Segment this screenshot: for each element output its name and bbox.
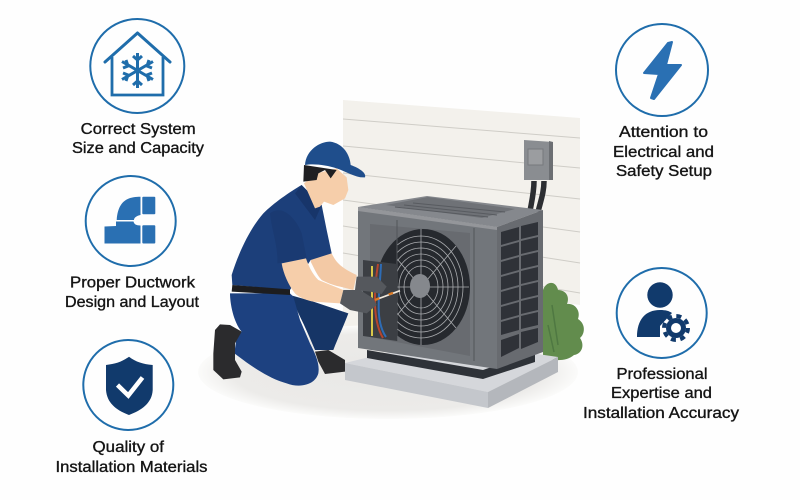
side face [497,210,543,369]
collar [295,185,322,220]
label: Professional [616,366,708,383]
icon: person with gear [617,268,707,358]
torso shirt [232,185,332,290]
wall siding [343,100,580,338]
feature: proper ductwork [65,176,200,311]
near glove [340,290,377,313]
near leg [230,293,319,386]
service panel seams [397,220,474,361]
cap [305,142,365,177]
feature: correct system size [72,19,204,157]
label: Attention to [619,124,708,141]
label [583,366,739,422]
label [56,439,208,476]
technician [213,142,400,386]
icon: house with snowflake [90,19,184,113]
label: Safety Setup [616,163,712,180]
label: Quality of [92,439,165,456]
belt [232,285,290,295]
feature: professional expertise [583,268,739,422]
feature: electrical safety [613,24,714,180]
icon: lightning bolt [616,24,708,116]
label: Size and Capacity [72,140,204,157]
feature: quality materials [56,340,208,476]
icon: duct [86,176,176,266]
label [72,121,204,157]
label: Correct System [81,121,196,138]
label: Expertise and [611,385,712,402]
fan panel [370,224,470,356]
hair [303,165,337,182]
screwdriver [377,291,400,299]
label: Proper Ductwork [70,274,195,292]
top face [358,196,543,227]
near sleeve [270,210,307,263]
label: Design and Layout [65,294,200,311]
label [613,124,714,180]
rear boot [315,350,345,374]
side vents [501,222,538,357]
label: Installation Materials [56,459,208,476]
front face [358,207,497,369]
label: Installation Accuracy [583,405,739,422]
label [65,274,200,311]
far glove [355,277,387,294]
open electrical box [363,260,397,341]
fan grille [371,229,470,345]
condenser unit [358,196,543,379]
icon: shield check [83,340,173,430]
label: Electrical and [613,144,714,161]
neck and face [304,168,348,208]
dark base [367,350,535,379]
near boot [213,324,242,379]
far arm [311,253,357,290]
bush [543,283,584,360]
ground shadow [198,325,578,419]
infographic canvas [56,18,740,472]
rear leg [290,295,348,350]
electrical disconnect box [524,140,553,212]
near arm [282,258,343,303]
concrete pad [345,340,558,408]
